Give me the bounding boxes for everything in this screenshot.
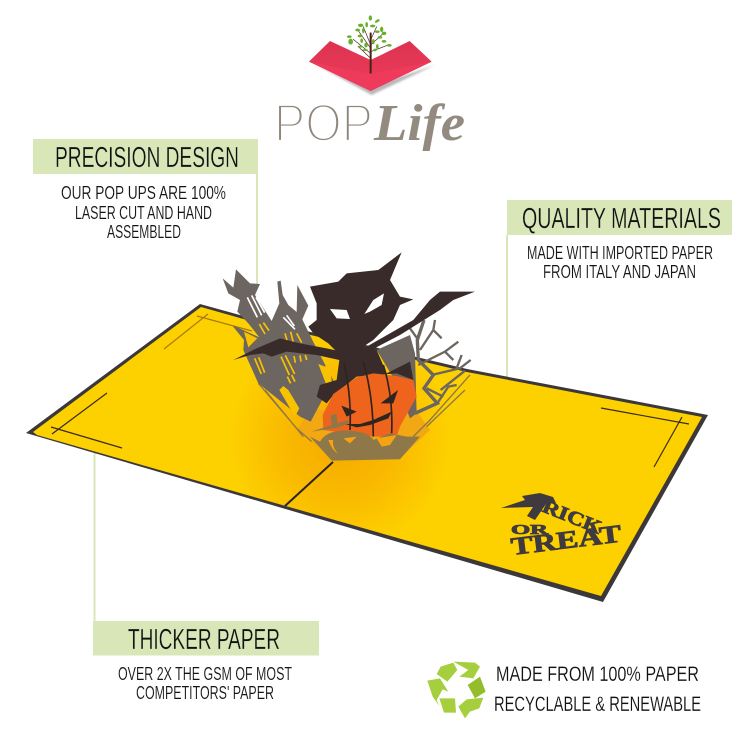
jack-o-lantern xyxy=(323,362,417,437)
logo wordmark: POP xyxy=(274,94,373,153)
card message: trick or treat: OR xyxy=(511,523,550,538)
castle windows, lit xyxy=(255,323,307,383)
logo mark: red book with tree xyxy=(309,15,435,95)
pop-up sculpture xyxy=(223,252,475,461)
logo wordmark xyxy=(274,94,465,153)
recycling badge xyxy=(427,662,701,718)
pop-up card xyxy=(26,252,708,602)
haunted castle xyxy=(223,269,334,422)
text: precision body: LASER CUT AND HAND xyxy=(75,203,212,223)
cat silhouette xyxy=(233,252,475,403)
castle windows, sky xyxy=(247,295,295,329)
text: precision body: OUR POP UPS ARE 100% xyxy=(61,183,226,203)
text: recycling claim xyxy=(494,663,701,716)
text: quality body xyxy=(527,243,713,282)
heading: thicker paper xyxy=(93,621,319,656)
front band with graves xyxy=(258,375,470,461)
text: thicker body: OVER 2X THE GSM OF MOST xyxy=(118,664,292,684)
inner floor shade xyxy=(297,407,430,458)
text: precision body: ASSEMBLED xyxy=(107,222,181,242)
cat eyes xyxy=(330,293,384,319)
icon: recycle symbol xyxy=(427,662,486,718)
right gray panel xyxy=(377,335,417,418)
logo xyxy=(274,15,465,153)
heading: thicker paper: THICKER PAPER xyxy=(128,624,280,656)
heading: precision design: PRECISION DESIGN xyxy=(55,142,239,174)
card base xyxy=(26,304,708,602)
callout: quality materials xyxy=(507,200,732,282)
text: precision body xyxy=(61,183,226,242)
text: thicker body xyxy=(118,664,292,703)
logo wordmark: Life xyxy=(373,95,465,152)
text: thicker body: COMPETITORS' PAPER xyxy=(136,683,274,703)
leader lines xyxy=(94,174,508,621)
callout: thicker paper xyxy=(93,621,319,703)
dead tree xyxy=(410,320,471,413)
card message: trick or treat xyxy=(501,493,623,561)
card message: trick or treat: RICK xyxy=(539,496,605,539)
callout: precision design xyxy=(33,139,258,242)
heading: precision design xyxy=(33,139,258,174)
card message: trick or treat: TREAT xyxy=(509,521,623,561)
